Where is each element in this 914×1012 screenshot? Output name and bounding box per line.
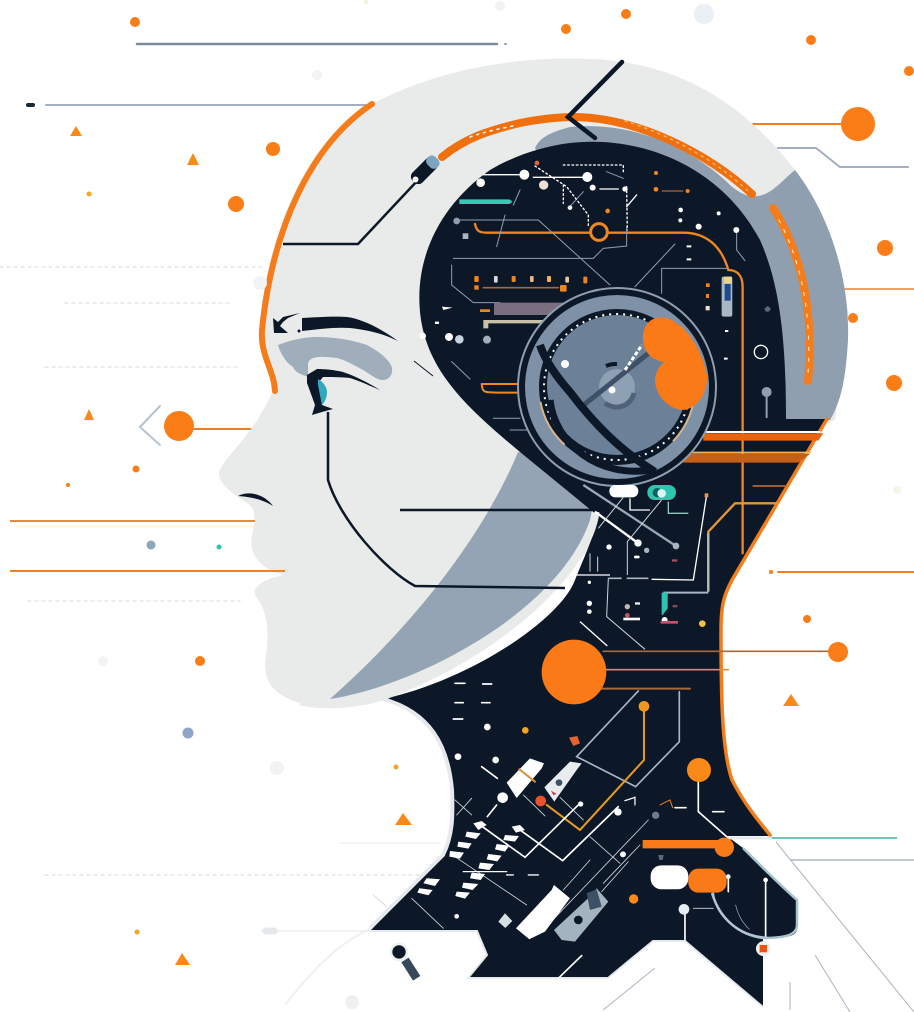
gold bus	[708, 503, 778, 592]
white striped connectors	[417, 821, 525, 899]
left face lines	[10, 521, 285, 571]
white nodes	[454, 724, 768, 928]
dark circuitry silhouette	[370, 142, 826, 1007]
lower stripes	[683, 432, 823, 463]
bottom grey route	[663, 590, 708, 596]
data blocks	[507, 758, 608, 942]
grey dash route	[608, 576, 648, 581]
face features	[238, 313, 398, 506]
orange pins row	[474, 161, 710, 312]
neck circuit panel	[577, 485, 787, 649]
eye	[307, 369, 380, 415]
brow shadow	[278, 337, 392, 380]
thin lines	[590, 497, 662, 649]
brow dot	[298, 330, 300, 332]
orange nodes	[522, 701, 711, 904]
neck traces	[577, 691, 679, 787]
big orange node with traces	[542, 640, 837, 704]
grey jaw shadow	[330, 452, 600, 699]
orange bar and knob	[643, 840, 718, 848]
grey traces	[452, 172, 745, 430]
iris	[318, 379, 327, 405]
capsule on wire	[408, 153, 442, 187]
brow bracket	[273, 313, 300, 333]
nose mark	[238, 493, 273, 506]
teal bar	[459, 199, 513, 204]
orange head outlines	[262, 104, 827, 835]
white nodes	[419, 170, 739, 360]
grey back of head	[535, 126, 848, 420]
outer orange triangles	[70, 126, 799, 965]
pills	[651, 865, 688, 889]
brain circuitry	[419, 161, 823, 553]
small data marks	[403, 797, 635, 875]
lens hub	[599, 369, 635, 405]
circuit dots	[587, 493, 708, 627]
teal pill	[647, 485, 676, 500]
bottom left and node	[391, 944, 407, 960]
small ring and pin	[754, 345, 768, 359]
eyebrow	[302, 317, 398, 341]
black head wires	[283, 62, 622, 588]
brown short lines	[753, 483, 787, 488]
white network	[483, 165, 637, 230]
orange lens blob	[643, 318, 707, 410]
head edge highlights	[285, 512, 914, 1012]
white routes	[577, 495, 707, 646]
neck circuitry	[373, 640, 837, 978]
grey thick lines	[583, 485, 676, 546]
lens crossbar	[540, 345, 655, 472]
lens	[518, 288, 716, 486]
white pill	[609, 485, 638, 497]
white thick line	[595, 512, 638, 543]
purple bar	[494, 303, 567, 315]
chip	[722, 277, 732, 317]
light head silhouette	[219, 59, 848, 708]
orange trace with node	[475, 224, 743, 553]
teal strip	[662, 593, 668, 615]
